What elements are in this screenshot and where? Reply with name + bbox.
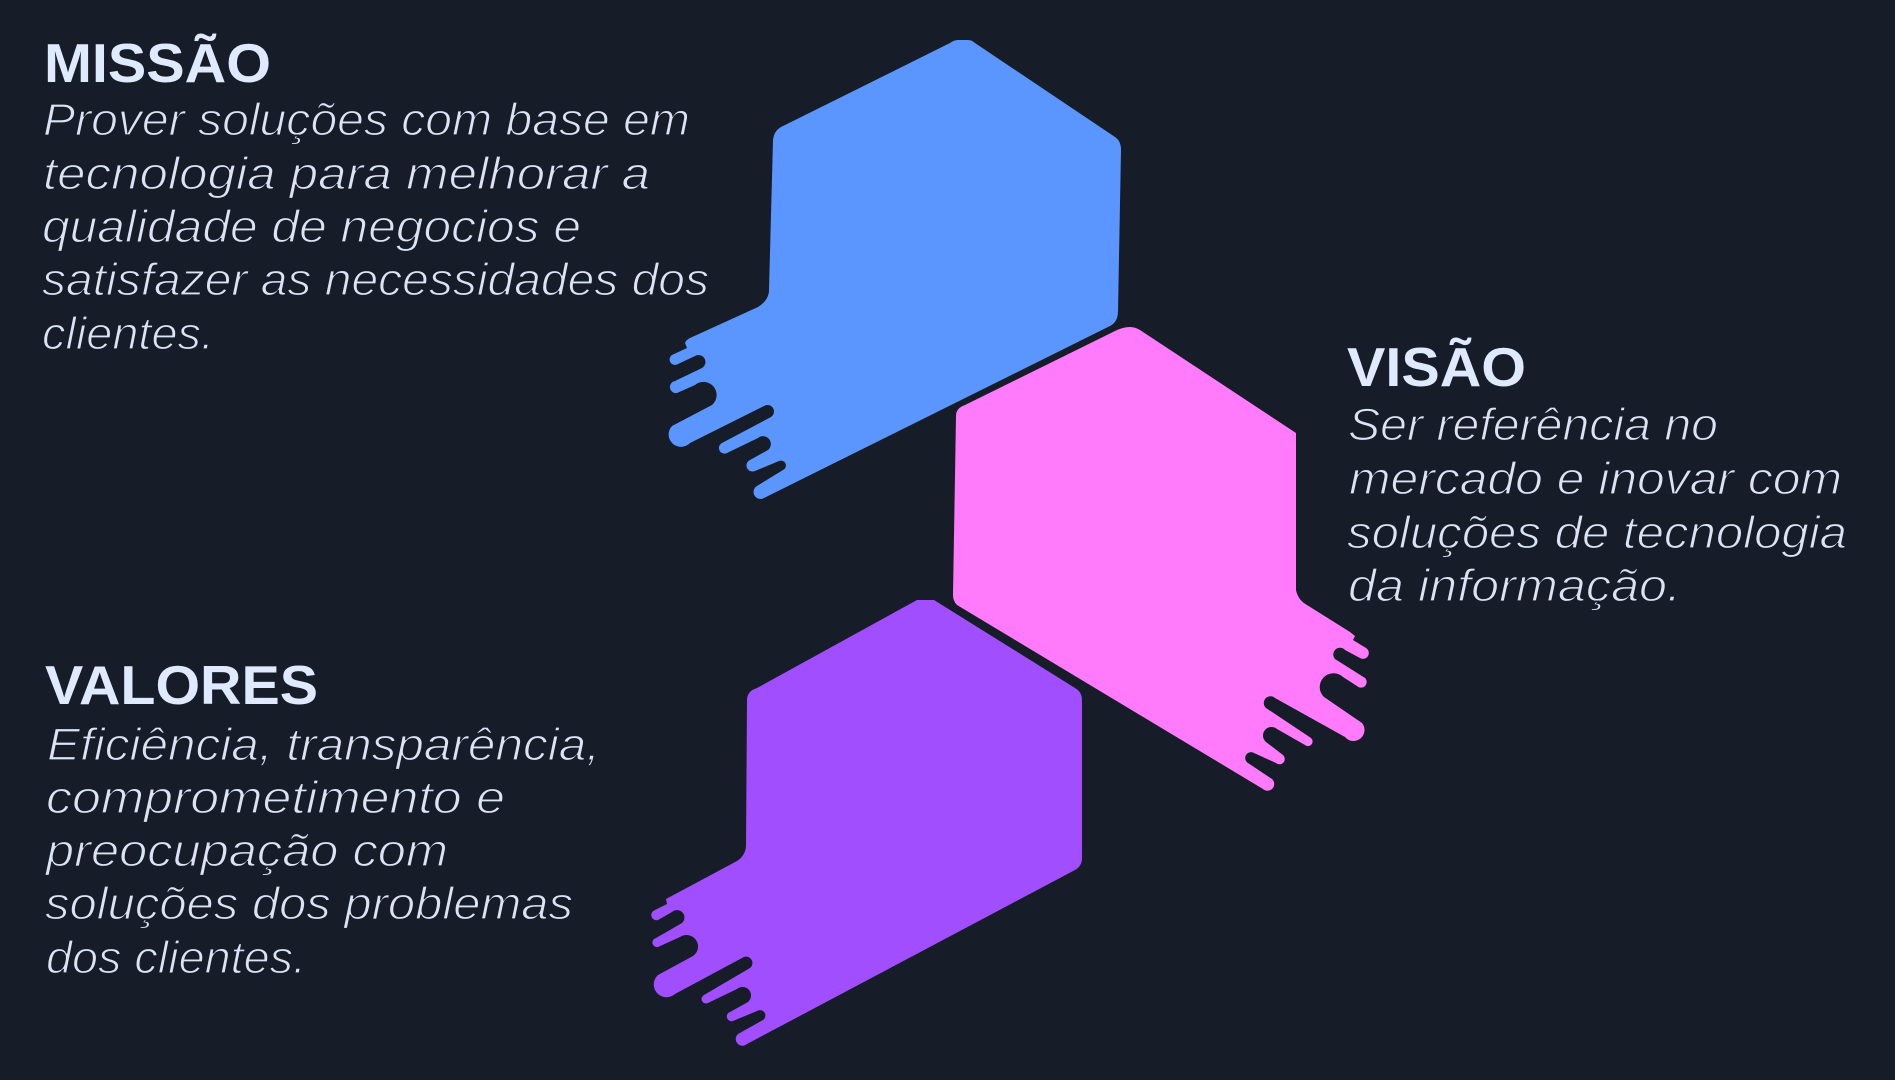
text block: Missão bbox=[42, 32, 709, 359]
body: Valores text bbox=[44, 719, 600, 983]
body: Visão text: mercado e inovar com bbox=[1349, 453, 1842, 504]
body: Valores text: preocupação com bbox=[44, 825, 448, 876]
text block: Visão bbox=[1347, 336, 1847, 611]
body: Missão text: satisfazer as necessidades dos bbox=[42, 254, 709, 305]
icon: purple dripping hexagon bbox=[651, 600, 1082, 1046]
heading: Visão: VISÃO bbox=[1347, 336, 1526, 398]
body: Missão text: clientes. bbox=[42, 308, 214, 359]
body: Valores text: comprometimento e bbox=[46, 772, 505, 823]
body: Missão text: qualidade de negocios e bbox=[42, 201, 581, 252]
body: Missão text bbox=[42, 94, 709, 359]
body: Valores text: dos clientes. bbox=[46, 932, 306, 983]
body: Missão text: Prover soluções com base em bbox=[43, 94, 690, 145]
body: Visão text bbox=[1347, 399, 1847, 611]
body: Visão text: soluções de tecnologia bbox=[1347, 507, 1847, 558]
body: Visão text: Ser referência no bbox=[1348, 399, 1718, 450]
body: Valores text: soluções dos problemas bbox=[45, 878, 573, 929]
icon: blue dripping hexagon bbox=[669, 40, 1121, 499]
icon: pink dripping hexagon bbox=[953, 327, 1369, 791]
body: Visão text: da informação. bbox=[1348, 560, 1681, 611]
heading: Valores: VALORES bbox=[45, 654, 318, 716]
text block: Valores bbox=[44, 654, 600, 983]
body: Missão text: tecnologia para melhorar a bbox=[43, 148, 650, 199]
heading: Missão: MISSÃO bbox=[44, 32, 271, 94]
body: Valores text: Eficiência, transparência, bbox=[47, 719, 600, 770]
